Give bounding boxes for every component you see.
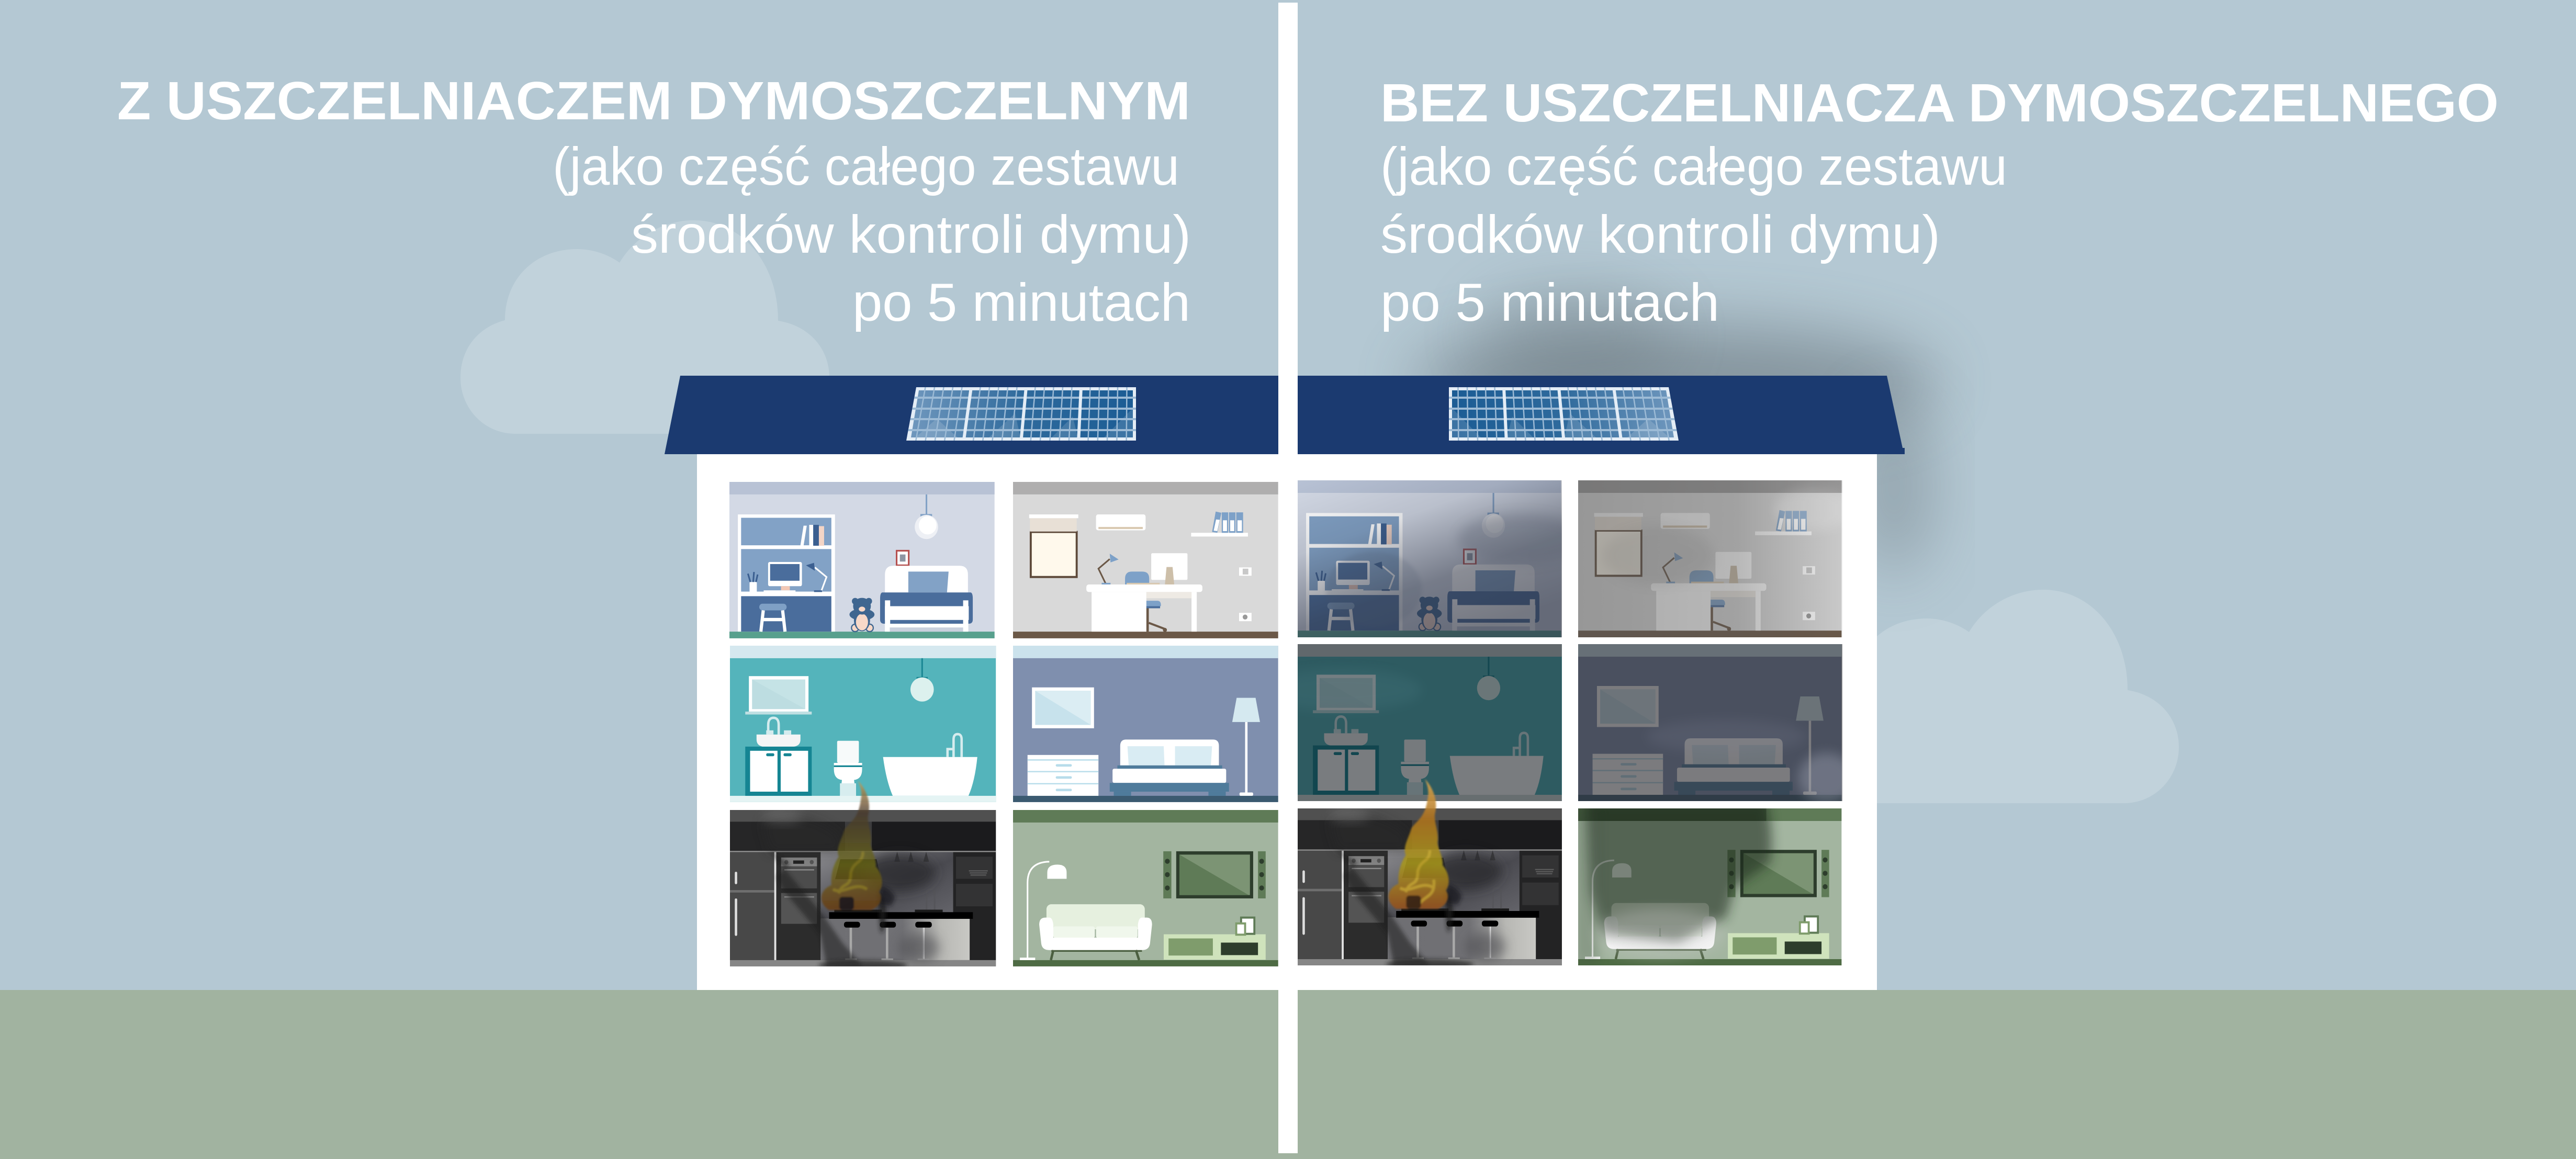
- room: bedroom, left house: [1013, 646, 1278, 802]
- wall picture: [1032, 688, 1094, 728]
- heading: right panel: [1380, 73, 2499, 332]
- cloud: left: [460, 220, 829, 434]
- desk lamp: [1098, 554, 1119, 585]
- smoke plume outside house: [1413, 288, 1936, 576]
- window: [1029, 514, 1078, 577]
- teddy bear: [849, 598, 874, 632]
- room: kids bedroom, left house: [729, 482, 995, 638]
- subheading: right panel: (jako część całego zestawu: [1380, 137, 2007, 196]
- range hood and ceiling lamps: [835, 852, 929, 879]
- subheading: right panel: środków kontroli dymu): [1380, 205, 1940, 264]
- room: home office with smoke, right house: [1578, 480, 1854, 637]
- subheading: right panel: po 5 minutach: [1380, 273, 1719, 332]
- arc floor lamp: [1020, 862, 1066, 960]
- subheading: left panel: [553, 137, 1191, 332]
- fire, right house: [1389, 779, 1449, 909]
- room: kitchen on fire, right house: [1298, 779, 1562, 969]
- cloud: right: [1810, 590, 2179, 803]
- ovens: [777, 852, 820, 960]
- air conditioner: [1096, 514, 1145, 530]
- bed: [880, 566, 973, 632]
- toilet: [834, 741, 862, 796]
- heading: left panel: Z USZCZELNIACZEM DYMOSZCZELNYM: [117, 71, 1190, 131]
- shelf with binders: [1191, 512, 1248, 536]
- house: white wall, left half: [697, 450, 1278, 994]
- subheading: right panel: [1380, 137, 2007, 332]
- smoke overlay: [1578, 480, 1854, 637]
- subheading: left panel: (jako część całego zestawu: [553, 137, 1179, 196]
- mirror: [745, 676, 812, 715]
- house: white wall, right half: [1298, 450, 1877, 994]
- sink cabinet: [745, 718, 812, 796]
- roof: left half: [665, 376, 1278, 454]
- room: bathroom with smoke, right house: [1298, 644, 1562, 801]
- upper cabinets: [730, 822, 996, 852]
- room: living room, left house: [1013, 810, 1278, 966]
- right cabinets: [953, 852, 996, 960]
- pendant lamp: [915, 494, 938, 539]
- room: bathroom, left house: [730, 646, 996, 802]
- bookshelf and desk: [738, 514, 835, 632]
- fridge: [730, 852, 777, 960]
- solar panel: left roof: [905, 387, 1138, 441]
- smoke overlay: [1574, 800, 1772, 965]
- back wall: [820, 852, 953, 918]
- sofa: [1039, 904, 1152, 960]
- smoke overlay: [1578, 644, 1854, 803]
- switch and socket: [1239, 567, 1252, 621]
- room: living room with smoke, right house: [1574, 800, 1841, 965]
- subheading: left panel: środków kontroli dymu): [631, 205, 1191, 264]
- smoke overlay: [1298, 644, 1562, 801]
- subheading: left panel: po 5 minutach: [852, 273, 1190, 332]
- heading: left panel: [117, 71, 1191, 332]
- kitchen island: [820, 889, 973, 960]
- picture frame: [897, 551, 909, 565]
- smoke overlay: [1298, 480, 1586, 637]
- central divider: [1278, 3, 1298, 1153]
- room: kitchen on fire, left house: [730, 781, 996, 970]
- room: home office, left house: [1013, 482, 1278, 638]
- desk, chair and monitor: [1086, 553, 1202, 632]
- bathtub: [883, 734, 977, 796]
- TV stand and picture frames: [1164, 918, 1266, 960]
- television and speakers: [1163, 851, 1266, 898]
- room: kids bedroom with smoke, right house: [1298, 480, 1586, 637]
- fire, left house: [822, 781, 882, 910]
- room: bedroom with smoke, right house: [1578, 644, 1854, 803]
- solar panel: right roof: [1447, 387, 1680, 441]
- heading: right panel: BEZ USZCZELNIACZA DYMOSZCZELNEGO: [1380, 73, 2499, 133]
- ground: [0, 990, 2576, 1159]
- dresser: [1028, 755, 1098, 796]
- pendant lamp: [910, 658, 934, 702]
- bed: [1110, 739, 1229, 796]
- roof: right half: [1298, 376, 1905, 454]
- floor lamp: [1232, 698, 1260, 796]
- smoke in kitchen: [762, 809, 939, 970]
